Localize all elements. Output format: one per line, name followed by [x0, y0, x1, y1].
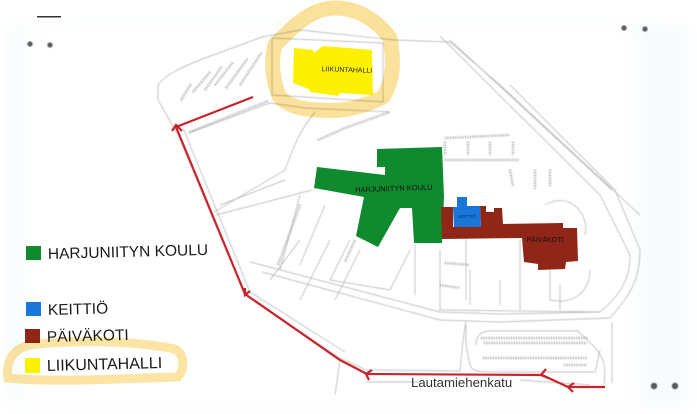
legend: Päiväkoti: PÄIVÄKOTI — [47, 327, 129, 346]
site plan linework — [158, 30, 640, 395]
legend: Liikuntahalli: LIIKUNTAHALLI — [47, 355, 162, 375]
highlight ring around Liikuntahalli — [273, 8, 392, 110]
building: Harjuniityn koulu: HARJUNIITYN KOULU — [355, 183, 433, 194]
building: Harjuniityn koulu — [314, 147, 444, 247]
red route with arrows — [172, 97, 605, 392]
legend: Keittiö: KEITTIÖ — [48, 299, 108, 319]
building: Liikuntahalli — [293, 46, 373, 96]
legend: Keittiö — [26, 299, 108, 319]
parking rows — [181, 52, 587, 365]
building: Päiväkoti: PÄIVÄKOTI — [527, 236, 564, 244]
building: Liikuntahalli: LIIKUNTAHALLI — [322, 66, 372, 75]
legend: Harjuniityn koulu: HARJUNIITYN KOULU — [48, 242, 208, 263]
top edge mark — [37, 16, 61, 18]
building: Päiväkoti — [441, 206, 578, 270]
highlight ring around legend entry — [7, 342, 183, 380]
building: Keittiö — [453, 197, 481, 227]
street label: Lautamiehenkatu — [411, 375, 512, 390]
building: Keittiö: KEITTIÖ — [458, 213, 476, 219]
